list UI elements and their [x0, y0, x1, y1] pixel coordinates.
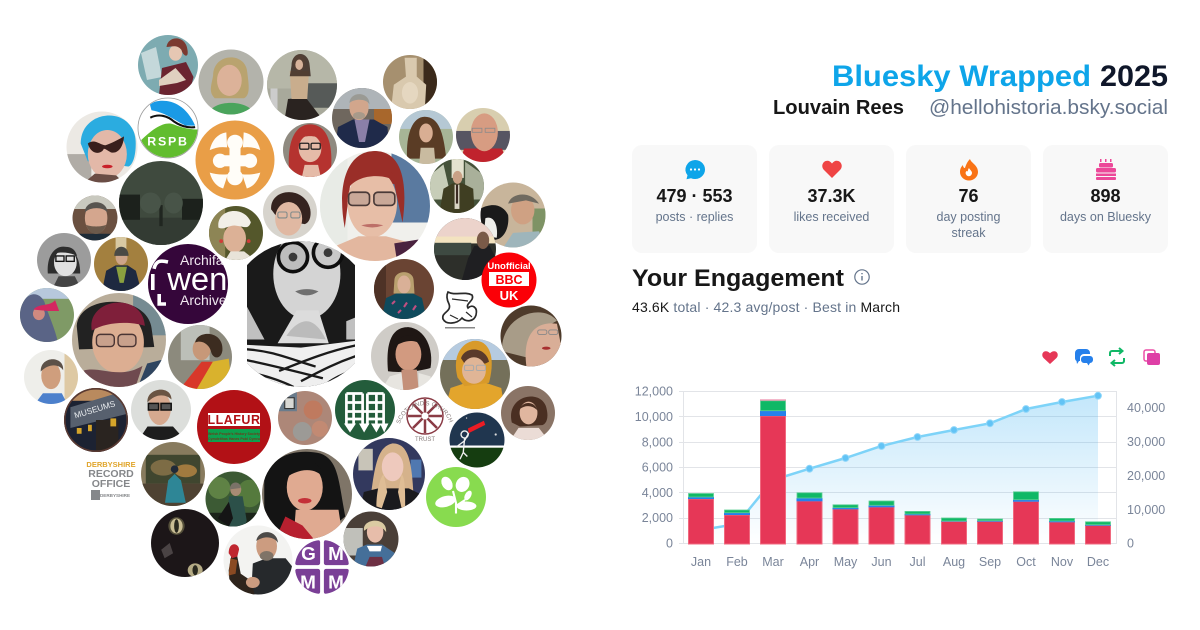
avatar: Scotland's Churches Trust logo: SCOTLAND'S CHURCHES: [396, 401, 454, 424]
header: [773, 60, 1168, 119]
cumulative area: [701, 396, 1098, 544]
avatar: Derbyshire Record Office logo: DERBYSHIRE: [86, 460, 136, 469]
avatar: National Trust oak leaf: [426, 467, 486, 527]
avatar: Derbyshire Record Office logo: [86, 460, 136, 500]
avatar: man in navy jacket: [332, 88, 392, 148]
x axis month labels: Nov: [1051, 555, 1074, 569]
avatar: man in blue shirt: [24, 350, 78, 404]
avatar: painting: [141, 442, 205, 506]
avatar: Llafur logo: Welsh People's History Society: [208, 432, 260, 436]
card: days on Bluesky: 898: [1090, 186, 1121, 206]
cumulative line: [701, 396, 1098, 530]
avatar: hiker among trees: [206, 472, 262, 526]
card: posting streak: 76: [958, 186, 979, 206]
avatar: red-haired woman with glasses: [283, 123, 337, 177]
avatar: woman in yellow raincoat: [440, 339, 510, 409]
x axis month labels: Sep: [979, 555, 1001, 569]
avatar cloud: [20, 35, 562, 594]
avatar: woman with long curly hair: [399, 110, 453, 164]
avatar: man in suit among snowy trees: [430, 159, 484, 213]
x axis month labels: Jul: [910, 555, 925, 569]
avatar: black and white portrait with glasses: [37, 233, 91, 287]
avatar: train illustration: [119, 161, 203, 245]
avatar: Scotland's Churches Trust logo: [396, 397, 454, 443]
avatar: GMMM purple logo: [295, 540, 349, 594]
avatar: GMMM purple logo: M: [328, 544, 344, 565]
avatar: Derbyshire Record Office logo: RECORD: [88, 468, 134, 480]
avatar: Archifau Gwent Archives logo: [148, 244, 236, 324]
avatar: short blonde woman: [344, 512, 398, 566]
stacked bars: quotes: [760, 399, 786, 401]
x axis month labels: Apr: [800, 555, 819, 569]
avatar: man with dog: [480, 182, 546, 248]
avatar: portcullis logo on green: [335, 380, 395, 440]
avatar: woman with dark hair and red dress: [262, 449, 352, 539]
y axis left labels: 8,000: [642, 436, 673, 450]
title: Bluesky Wrapped: [832, 60, 1091, 93]
avatar: GMMM purple logo: G: [301, 544, 316, 565]
avatar: Unofficial BBC UK logo: UK: [500, 288, 519, 303]
icon: info: [855, 270, 869, 284]
handle: @hellohistoria.bsky.social: [929, 97, 1168, 119]
card: likes: 37.3K: [807, 186, 856, 206]
avatar: black cat close-up: [151, 509, 219, 577]
avatar: RSPB logo: [138, 98, 198, 158]
engagement summary: 43.6K total · 42.3 avg/post · Best in March: [632, 299, 900, 315]
avatar: Derbyshire Record Office logo: DERBYSHIRE: [100, 493, 130, 498]
avatar: Archifau Gwent Archives logo: Archifau: [180, 252, 231, 268]
avatar: woman with grey-blonde hair: [500, 306, 562, 366]
avatar: woman in teal jumper: [374, 259, 434, 319]
stacked bars: reposts: [688, 401, 1110, 525]
cumulative points: [806, 392, 1101, 472]
card: days on Bluesky: days on Bluesky: [1060, 210, 1152, 224]
card: posting streak: streak: [951, 226, 986, 240]
card: days on Bluesky: [1043, 145, 1168, 253]
avatar: Archifau Gwent Archives logo: went: [166, 260, 236, 297]
heading: Your Engagement: Your Engagement: [632, 265, 844, 292]
y axis right labels: 20,000: [1127, 469, 1165, 483]
display name: Louvain Rees: [773, 97, 904, 119]
avatar: stick figure with telescope: [450, 412, 504, 468]
x axis month labels: Aug: [943, 555, 965, 569]
avatar: woman in maroon beanie: [72, 293, 166, 387]
x axis month labels: Feb: [726, 555, 748, 569]
x axis month labels: Oct: [1016, 555, 1036, 569]
avatar: blonde woman: [198, 50, 264, 114]
avatar: orange cross logo: [196, 120, 274, 200]
avatar: GMMM purple logo: M: [328, 573, 344, 594]
avatar: woman on sofa: [267, 50, 337, 120]
avatar: dragon line-art logo: [443, 292, 476, 328]
avatar: woman with curly hair: [501, 386, 555, 440]
avatar: blue-haired woman in sunglasses: [66, 112, 138, 182]
icon: chat bubble: [685, 160, 705, 179]
avatar: Llafur logo: LLAFUR: [208, 413, 260, 427]
icon: replies legend bubbles: [1075, 349, 1093, 366]
icon: likes legend heart: [1042, 351, 1058, 364]
title year: 2025: [1100, 60, 1168, 93]
stacked bars: likes: [688, 416, 1110, 544]
avatar: bearded man in yellow and red flag: [168, 325, 232, 389]
avatar: Unofficial BBC UK logo: [482, 252, 536, 308]
chart legend: [1042, 348, 1160, 366]
avatar: Unofficial BBC UK logo: Unofficial: [487, 261, 531, 272]
y axis right labels: 30,000: [1127, 435, 1165, 449]
avatar: central black and white portrait: [247, 241, 355, 387]
y axis left labels: 2,000: [642, 511, 673, 525]
stacked bars: replies: [688, 411, 1111, 526]
y axis left labels: 0: [666, 536, 673, 550]
x axis month labels: [691, 555, 1109, 569]
y axis left labels: [635, 384, 673, 550]
avatar: Llafur logo: [197, 390, 271, 464]
stat cards: [632, 145, 1168, 253]
avatar: Llafur logo: Cymdeithas Hanes Pobl Cymru: [208, 437, 260, 441]
y axis right labels: 40,000: [1127, 401, 1165, 415]
y axis left labels: 6,000: [642, 460, 673, 474]
card: posting streak: day posting: [937, 210, 1001, 224]
card: likes: likes received: [794, 210, 869, 224]
x axis month labels: May: [834, 555, 858, 569]
avatar: blonde woman in dark setting: [353, 438, 425, 510]
y axis right labels: [1127, 401, 1165, 550]
x axis month labels: Dec: [1087, 555, 1109, 569]
avatar: RSPB logo: RSPB: [147, 135, 189, 149]
engagement chart: [635, 384, 1165, 569]
icon: birthday cake: [1096, 159, 1116, 180]
avatar: Derbyshire Record Office logo: OFFICE: [92, 478, 130, 490]
avatar: Museums building sign: [64, 388, 128, 452]
icon: quotes legend squares: [1144, 350, 1160, 365]
icon: reposts legend arrows: [1110, 348, 1124, 366]
avatar: GMMM purple logo: M: [300, 573, 316, 594]
card: likes: [769, 145, 894, 253]
card: posting streak: [906, 145, 1031, 253]
avatar: Scotland's Churches Trust logo: TRUST: [415, 437, 435, 443]
avatar: person in hat with autumn trees: [94, 237, 148, 291]
avatar: Archifau Gwent Archives logo: Archives: [180, 292, 234, 308]
avatar: man holding a rooster: [224, 526, 292, 594]
avatar: bald man with glasses in red: [456, 108, 510, 162]
x axis month labels: Jan: [691, 555, 711, 569]
y axis right labels: 0: [1127, 536, 1134, 550]
avatar: stone sculpture: [383, 55, 437, 109]
y axis left labels: 4,000: [642, 486, 673, 500]
avatar: bearded man smiling: [72, 196, 118, 240]
card: posts and replies: 479 · 553: [656, 186, 733, 206]
y axis left labels: 10,000: [635, 410, 673, 424]
x axis month labels: Jun: [871, 555, 892, 569]
avatar: Museums building sign: MUSEUMS: [73, 398, 117, 420]
avatar: woman in santa hat: [209, 206, 263, 260]
card: posts and replies: [632, 145, 757, 253]
avatar: comic character: [138, 35, 198, 95]
x axis month labels: Mar: [762, 555, 784, 569]
avatar: large portrait, red-haired woman with glasses: [320, 151, 430, 261]
icon: heart: [822, 161, 842, 178]
y axis left labels: 12,000: [635, 384, 673, 398]
card: posts and replies: posts · replies: [656, 210, 733, 224]
icon: flame: [960, 159, 978, 180]
avatar: woman with black bob: [371, 322, 439, 390]
y axis right labels: 10,000: [1127, 503, 1165, 517]
avatar: pebbled wall: [278, 391, 332, 445]
avatar: sunset crowd: [434, 218, 496, 280]
gridlines: [679, 391, 1116, 544]
avatar: Unofficial BBC UK logo: BBC: [495, 273, 523, 287]
avatar: man in black glasses: [131, 380, 191, 440]
avatar: woman with pink hair in hood: [20, 288, 74, 342]
avatar: dark-haired woman with glasses: [263, 185, 317, 239]
